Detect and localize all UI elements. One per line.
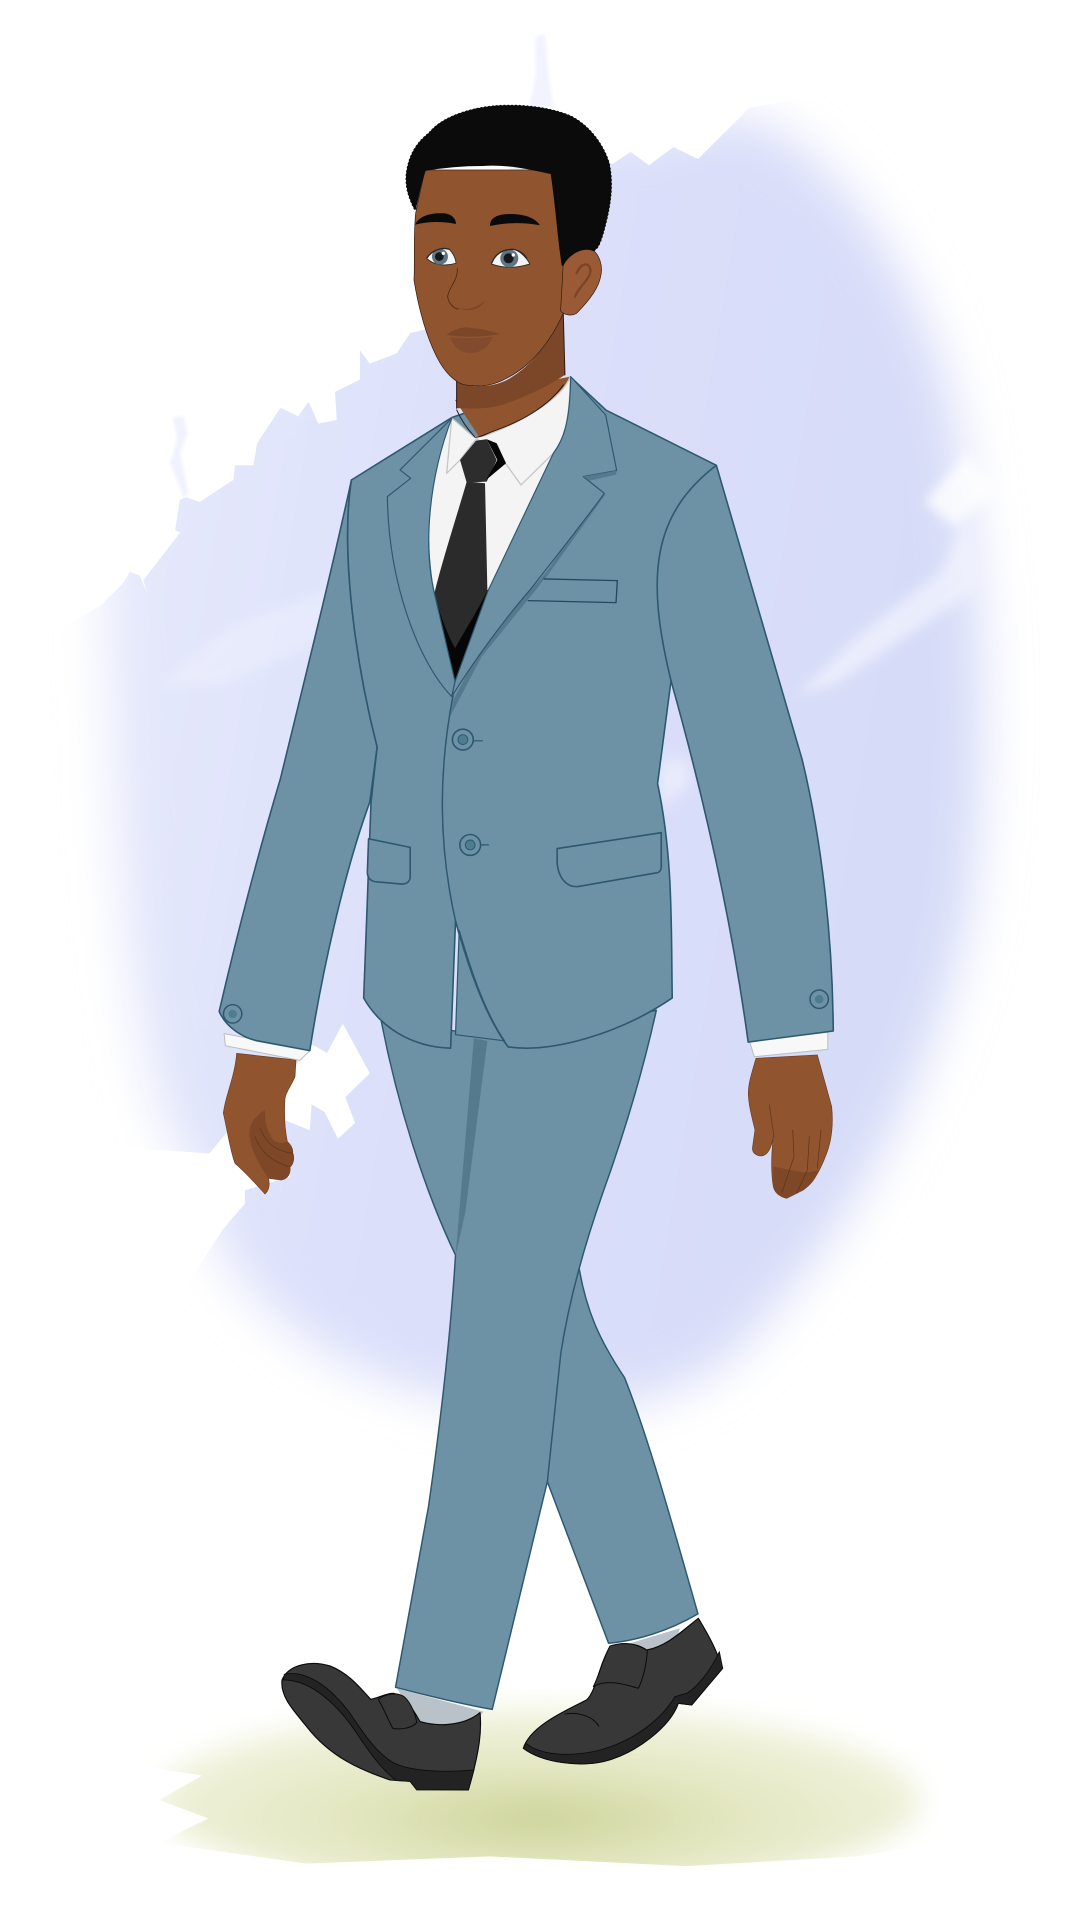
collar neck line	[457, 385, 563, 437]
hip pocket flaps	[367, 833, 661, 887]
tie blade	[434, 482, 487, 648]
shirt cuffs	[224, 1032, 828, 1060]
right hand	[748, 1055, 832, 1198]
right shoe and sock	[523, 1618, 723, 1764]
ground: green shadow patch	[157, 1707, 921, 1893]
right sleeve	[650, 465, 833, 1042]
jacket buttons	[452, 729, 489, 855]
background: watercolor blue blob	[105, 116, 998, 1412]
left sleeve	[219, 480, 377, 1051]
shirt	[429, 377, 570, 682]
eye: right	[491, 249, 530, 267]
eye: left	[427, 248, 456, 265]
neck shadow	[457, 313, 565, 408]
sock	[630, 1628, 680, 1650]
background: faint torn streaks	[170, 34, 553, 497]
lapel: left	[387, 418, 455, 697]
head	[407, 106, 610, 408]
tie shadow	[434, 590, 488, 682]
figure: walking man	[219, 106, 833, 1790]
face	[414, 170, 565, 386]
eyebrow: right	[490, 214, 540, 226]
jacket front edge	[442, 696, 508, 1047]
hair	[407, 106, 610, 265]
cuff buttons	[223, 990, 828, 1023]
lips	[447, 327, 500, 353]
shoe upper	[523, 1618, 723, 1764]
sole band	[283, 1674, 474, 1790]
left shoe and sock	[282, 1663, 483, 1790]
chest pocket	[528, 579, 617, 603]
trousers: front leg	[381, 1010, 656, 1709]
sock	[397, 1688, 483, 1728]
jacket body	[348, 377, 716, 1048]
shoe crease	[565, 1713, 599, 1726]
shoe strap	[378, 1694, 417, 1729]
neck base	[455, 377, 570, 438]
shoe upper	[282, 1663, 481, 1790]
knuckle shading	[773, 1167, 818, 1198]
ear	[561, 248, 601, 315]
shoe strap	[593, 1644, 647, 1688]
tie knot	[460, 439, 497, 483]
finger lines	[769, 1105, 821, 1193]
fingers shading	[249, 1110, 294, 1180]
torso front: shirt, tie, lapels, pocket	[387, 377, 617, 717]
sole band	[523, 1652, 723, 1764]
lapel: right	[452, 377, 617, 697]
trousers: back leg	[539, 1261, 698, 1643]
trouser crease	[456, 1038, 487, 1256]
jacket inner flap	[456, 931, 504, 1041]
left hand	[223, 1053, 296, 1194]
eyebrow: left	[415, 213, 456, 225]
lapel shadow: right	[450, 492, 605, 717]
nose	[448, 268, 485, 310]
collar	[447, 377, 570, 485]
